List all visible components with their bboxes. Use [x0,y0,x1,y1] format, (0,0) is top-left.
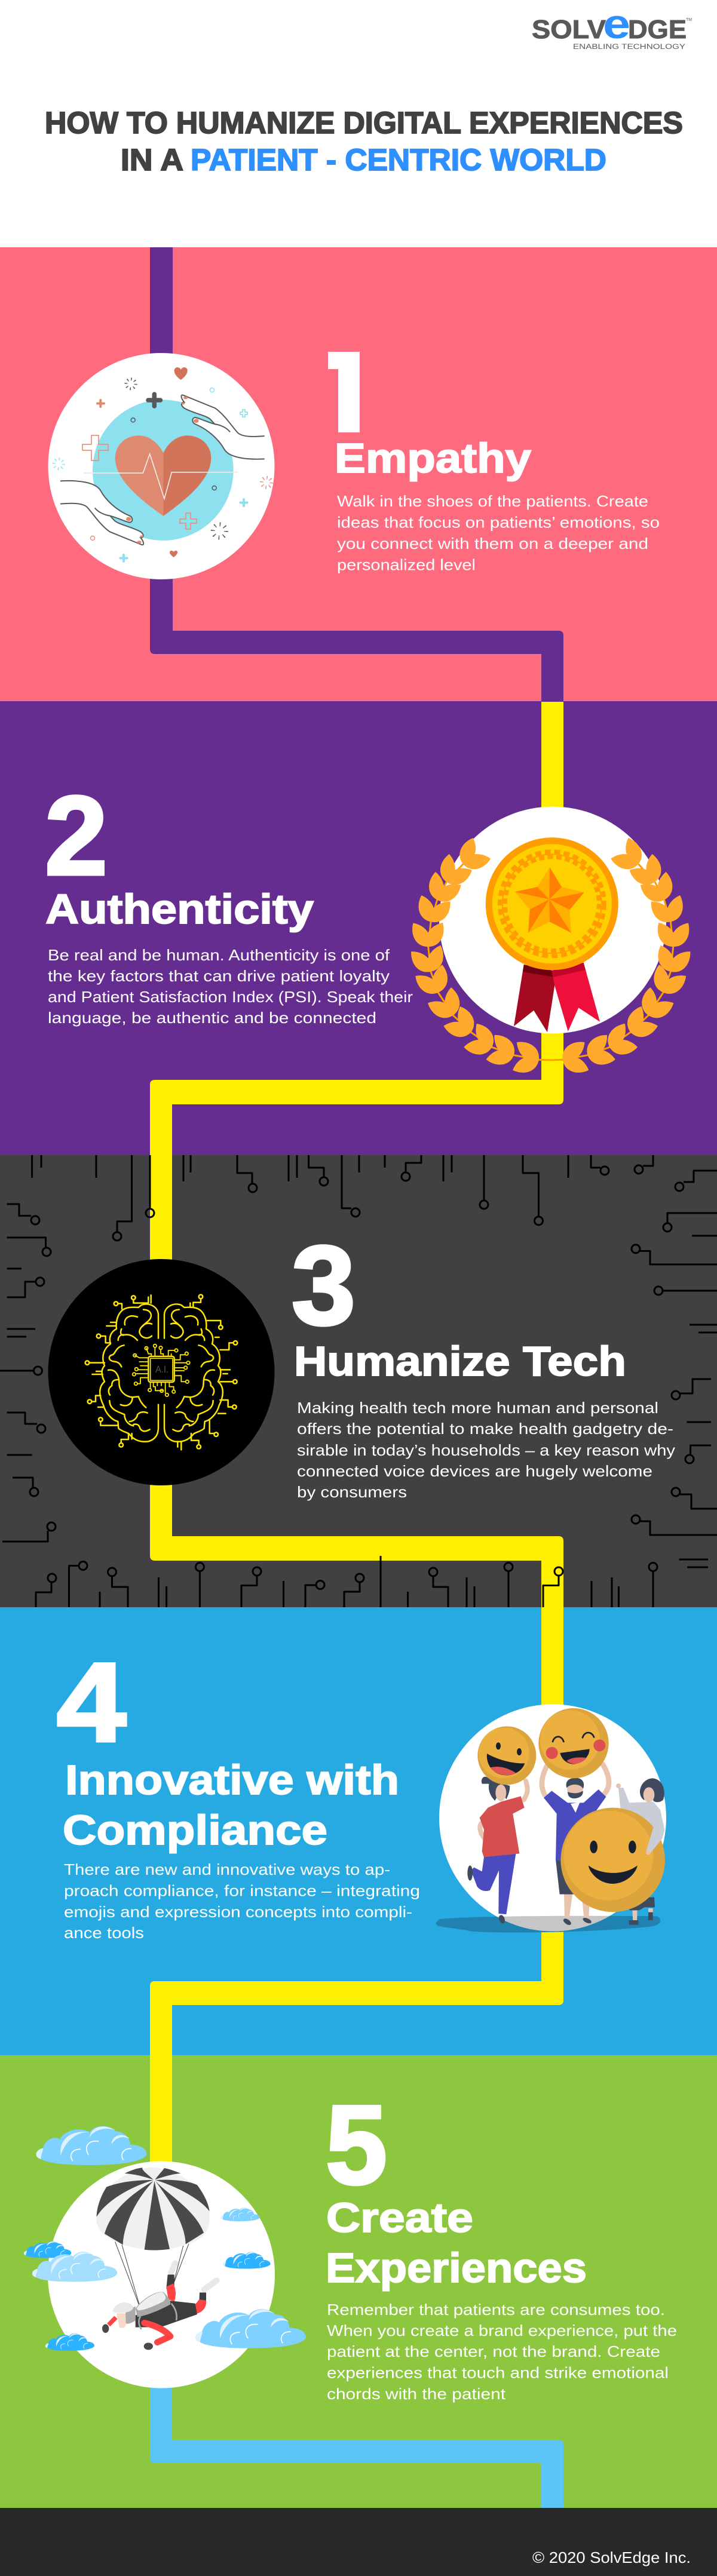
footer [0,2508,717,2576]
panel: empathy [0,247,717,702]
text block: compliance: emojis and expression concepts into compli- [64,1903,412,1921]
text block: experiences: When you create a brand experience, put the [327,2322,677,2339]
number 1: 1 [315,331,375,456]
panel: humanize tech [0,1155,717,1607]
person middle [542,1764,609,1926]
path connector yellow [150,702,563,1155]
heading: Empathy: Empathy [335,435,531,481]
text block: experiences: chords with the patient [327,2385,506,2403]
text block: experiences: Remember that patients are consumes too. [327,2301,665,2319]
path connector yellow [150,1607,563,2055]
page background [0,0,717,247]
text block: authenticity: and Patient Satisfaction Index (PSI). Speak their [48,988,413,1006]
text block: empathy: Walk in the shoes of the patients. Create [337,492,648,510]
text block: experiences [327,2301,677,2403]
text block: authenticity [48,946,413,1027]
number 5: 5 [326,2082,387,2207]
emoji smiling [560,1808,665,1912]
logo: SolvEdge: DGE [628,15,687,44]
text block: authenticity: the key factors that can drive patient loyalty [48,967,390,985]
copyright: © 2020 SolvEdge Inc. [532,2549,691,2566]
panel: create experiences [0,2055,717,2508]
heading: Authenticity: Authenticity [45,886,314,932]
number 3: 3 [292,1223,356,1348]
text block: empathy: you connect with them on a deeper and [337,535,648,552]
title: PATIENT - CENTRIC WORLD [191,143,606,177]
title: HOW TO HUMANIZE DIGITAL EXPERIENCES [45,106,683,140]
emoji laughing [477,1726,536,1785]
panel: authenticity [0,701,717,1155]
text block: experiences: patient at the center, not the brand. Create [327,2342,660,2360]
text block: compliance: ance tools [64,1924,144,1942]
text block: empathy: ideas that focus on patients’ emotions, so [337,514,660,532]
person left [467,1777,528,1924]
heading: Innovative with Compliance: Compliance [63,1807,327,1853]
icon: people holding emojis [436,1705,666,1933]
text block: humanize tech: connected voice devices are hugely welcome [297,1462,652,1480]
logo: SolvEdge: e [603,1,630,47]
number 1 [328,352,360,432]
parachute [96,2167,210,2305]
path connector purple [150,247,563,702]
icon: skydiver with clouds [24,2126,306,2388]
skydiver [102,2263,217,2350]
icon: AI brain: A.I. [155,1365,168,1375]
icon: medal with wreath [406,806,695,1077]
text block: compliance: proach compliance, for instance – integrating [64,1881,420,1899]
circuit background pattern [0,1155,717,1607]
icon: heart in hands [48,353,275,579]
heading: Innovative with Compliance [63,1757,399,1853]
panel: innovative with compliance [0,1607,717,2055]
text block: compliance [64,1860,420,1942]
text block: authenticity: Be real and be human. Authenticity is one of [48,946,390,964]
icon: AI brain [48,1259,275,1485]
title [45,106,683,177]
text block: humanize tech [297,1399,675,1501]
number 2: 2 [45,773,108,898]
logo: SolvEdge: SOLV [532,15,606,44]
text block: compliance: There are new and innovative ways to ap- [64,1860,390,1878]
logo: SolvEdge: ENABLING TECHNOLOGY [573,44,685,51]
path connector yellow [150,1155,563,1607]
person right [616,1778,664,1925]
text block: humanize tech: Making health tech more human and personal [297,1399,658,1417]
heading: Humanize Tech: Humanize Tech [294,1338,626,1384]
title: IN A [121,143,183,177]
logo: SolvEdge [532,1,692,51]
text block: experiences: experiences that touch and strike emotional [327,2364,669,2382]
emoji blushing [538,1708,609,1778]
logo: SolvEdge: TM [686,18,692,22]
text block: authenticity: language, be authentic and be connected [48,1009,376,1027]
path connector light blue [150,2383,563,2508]
heading: Create Experiences [326,2194,587,2291]
heading: Create Experiences: Experiences [326,2245,587,2291]
text block: humanize tech: offers the potential to make health gadgetry de- [297,1420,673,1438]
heading: Create Experiences: Create [326,2194,473,2241]
text block: empathy [337,492,660,573]
text block: humanize tech: by consumers [297,1483,407,1501]
path connector yellow [150,2055,172,2169]
number 4: 4 [57,1639,126,1765]
text block: humanize tech: sirable in today’s households – a key reason why [297,1441,675,1459]
clouds [24,2126,306,2351]
text block: empathy: personalized level [337,555,476,573]
heading: Innovative with Compliance: Innovative with [65,1757,399,1803]
